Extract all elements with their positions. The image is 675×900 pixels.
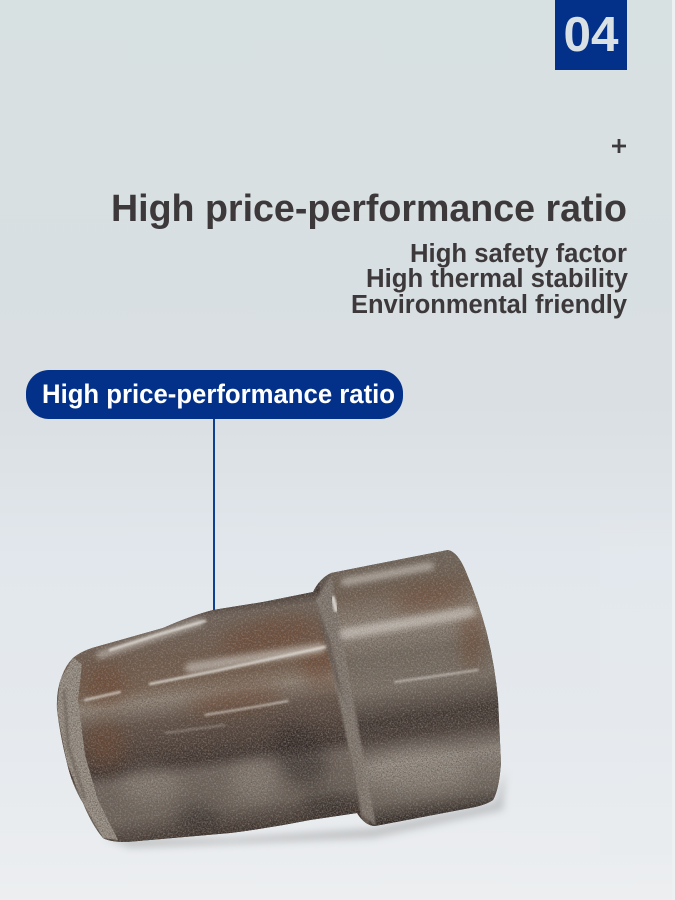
rust patches — [83, 579, 484, 767]
soft glow behind highlights — [100, 566, 470, 668]
callout label — [26, 370, 403, 419]
icon: plus — [612, 139, 626, 153]
product photo: metal pipe fitting — [50, 540, 510, 860]
shoulder weld — [316, 575, 376, 826]
specular highlights — [85, 598, 478, 733]
feature list: High safety factor — [410, 240, 627, 268]
callout label: High price-performance ratio — [42, 379, 395, 409]
light patches on lower body — [120, 748, 470, 803]
number badge — [555, 0, 627, 70]
narrow section — [60, 582, 362, 842]
number badge: 04 — [564, 8, 618, 62]
feature list — [351, 240, 629, 319]
grain texture — [50, 540, 510, 850]
cut end rim — [57, 658, 118, 840]
pipe body — [56, 550, 501, 842]
title: High price-performance ratio — [111, 188, 627, 230]
wide section — [330, 550, 501, 826]
pipe shadow — [105, 770, 505, 848]
dark shadow patches — [176, 714, 360, 832]
callout leader line — [213, 419, 215, 611]
feature list: Environmental friendly — [351, 291, 628, 319]
feature list: High thermal stability — [366, 265, 629, 293]
